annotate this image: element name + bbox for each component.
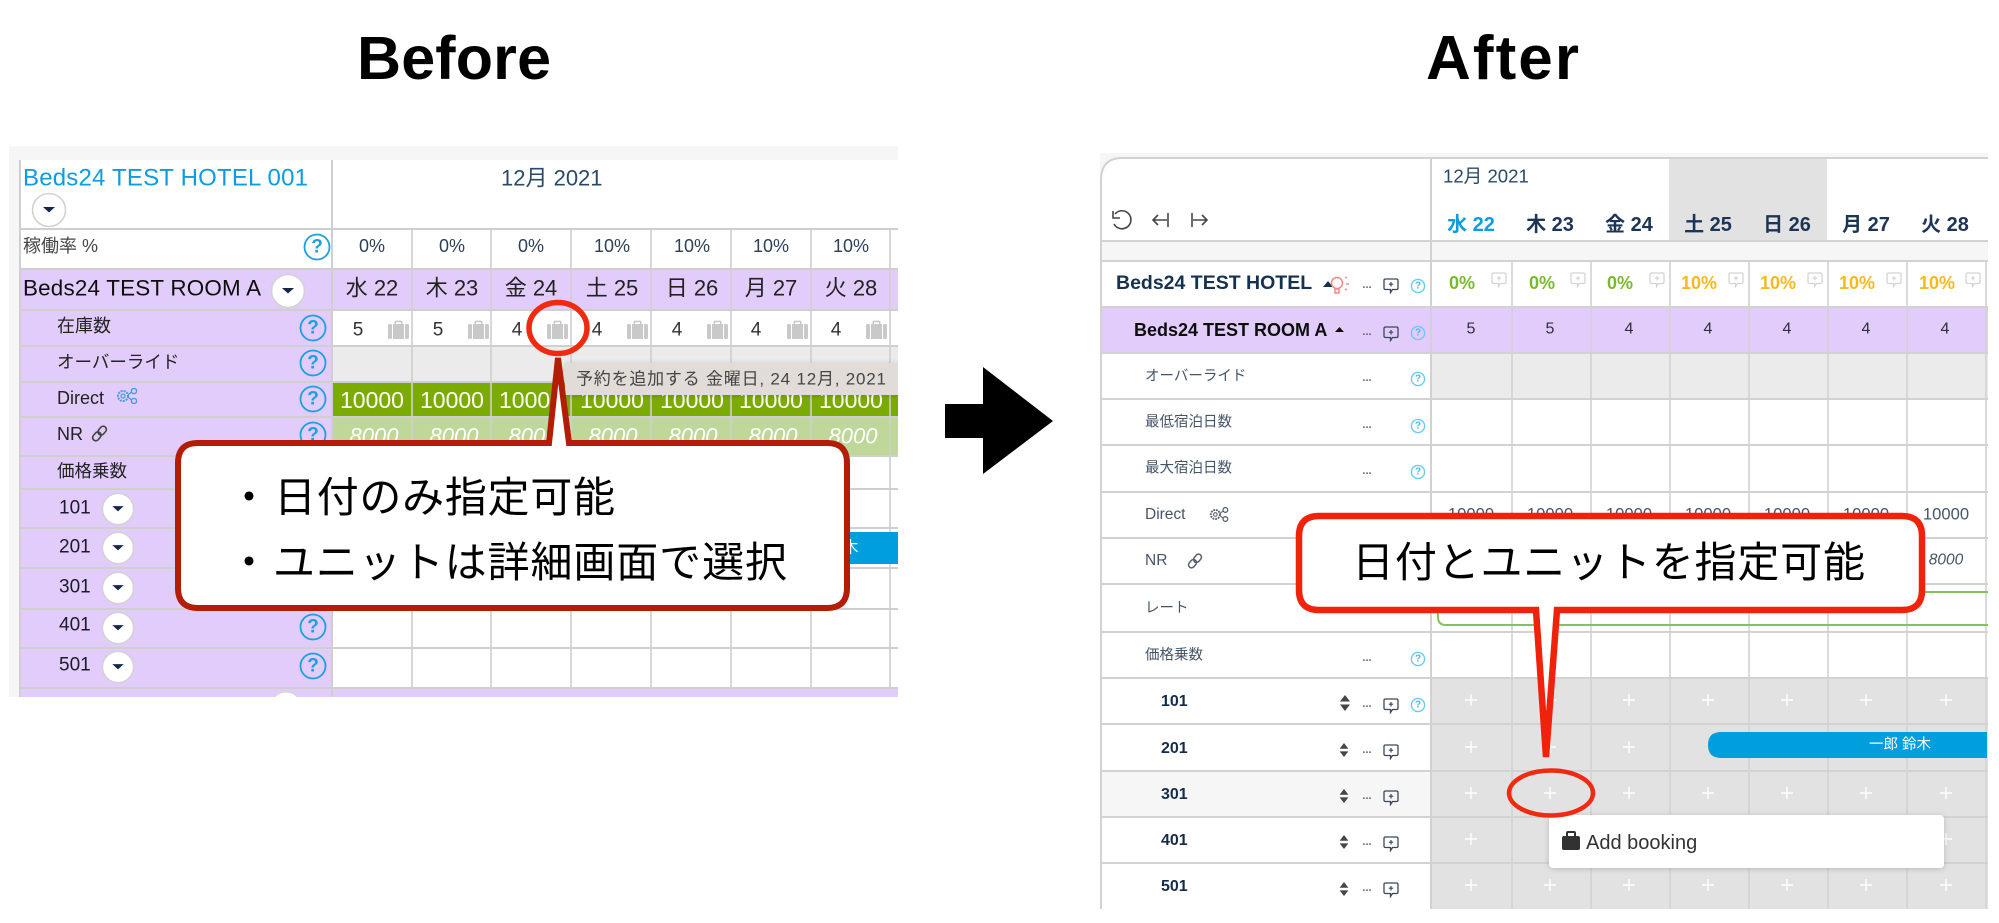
- NR price: 8000: [1929, 552, 1964, 568]
- panel: before screenshot: [9, 146, 898, 724]
- booking bar: 一郎 鈴木: [1869, 736, 1932, 753]
- setting rows: 価格乗数: [1145, 646, 1203, 664]
- hotel row: Beds24 TEST HOTEL: [1116, 272, 1312, 294]
- setting rows: [1145, 368, 1425, 666]
- hotel row: ...: [1362, 279, 1372, 291]
- unit rows: ...: [1362, 744, 1372, 756]
- unit rows: 301: [59, 576, 91, 598]
- unit rows: ...: [1362, 698, 1372, 710]
- setting rows: ...: [1362, 419, 1372, 431]
- direct price row: 10000: [1923, 504, 1969, 524]
- inventory row: 5: [353, 320, 363, 340]
- setting rows: 最大宿泊日数: [1145, 460, 1232, 476]
- occupancy row: 稼働率 %: [23, 236, 98, 256]
- direct price row: 10000: [1685, 504, 1731, 524]
- NR price row: 8000: [589, 424, 638, 448]
- direct price row: [340, 387, 883, 413]
- row labels: NR: [57, 424, 83, 444]
- callout: date only: [178, 358, 847, 608]
- unit rows: 101: [59, 498, 91, 518]
- inventory row: 4: [592, 320, 603, 340]
- row labels: ?: [307, 352, 319, 374]
- row labels: [57, 316, 326, 678]
- NR price row: 8000: [829, 424, 878, 448]
- setting rows: ...: [1362, 465, 1372, 477]
- hotel row: [1116, 272, 1980, 294]
- weekday header: 水 22: [1447, 213, 1495, 236]
- row labels: ?: [307, 616, 319, 638]
- hotel row: 10%: [1839, 273, 1875, 293]
- setting rows: ...: [1362, 652, 1372, 664]
- unit rows: [59, 493, 302, 724]
- booking bar: [1708, 732, 1987, 758]
- inventory row: 4: [512, 320, 523, 340]
- unit rows: [1161, 693, 1425, 896]
- month label: 12月 2021: [501, 166, 603, 190]
- room row: 5: [1467, 320, 1476, 338]
- room header row: 日 26: [666, 276, 718, 300]
- unit rows: ...: [1362, 836, 1372, 848]
- unit rows: 401: [1161, 832, 1188, 849]
- NR price row: 8000: [669, 424, 718, 448]
- room row: 4: [1783, 320, 1792, 338]
- row labels: 在庫数: [57, 316, 111, 336]
- room header row: 月 27: [745, 276, 797, 300]
- NR price row: [350, 424, 878, 448]
- room row: 4: [1704, 320, 1713, 338]
- room row: 4: [1625, 320, 1634, 338]
- hotel row: 10%: [1681, 273, 1717, 293]
- add-booking plus grid: [1465, 694, 1952, 891]
- header controls: [1113, 211, 1207, 229]
- setting rows: レート: [1145, 600, 1188, 616]
- room row: Beds24 TEST ROOM A: [1134, 320, 1327, 340]
- occupancy row: 0%: [439, 236, 465, 256]
- row labels: ?: [307, 318, 319, 338]
- direct price row: 10000: [499, 387, 563, 413]
- row labels: ?: [307, 388, 319, 410]
- direct price row: 10000: [1527, 504, 1573, 524]
- unit rows: ...: [1362, 790, 1372, 802]
- unit rows: 101: [1161, 693, 1188, 710]
- room header row: 火 28: [825, 276, 877, 300]
- tooltip: [565, 363, 898, 395]
- direct price row: [1448, 504, 1969, 524]
- unit rows: 501: [1161, 878, 1188, 895]
- direct price row: 10000: [580, 387, 644, 413]
- hotel row: 0%: [1449, 273, 1475, 293]
- setting rows: オーバーライド: [1145, 368, 1246, 384]
- weekday header: 土 25: [1684, 213, 1732, 236]
- unit rows: 201: [59, 536, 91, 558]
- inventory row: 4: [751, 320, 762, 340]
- setting rows: ...: [1362, 372, 1372, 384]
- month label: 12月 2021: [1443, 166, 1529, 186]
- room row: ?: [1415, 328, 1421, 338]
- direct price row: 10000: [420, 387, 484, 413]
- occupancy row: ?: [311, 236, 323, 258]
- panel: after screenshot: [1100, 153, 1988, 909]
- row labels: Direct: [57, 388, 104, 408]
- callout: date only: ユニットは詳細画面で選択: [273, 539, 787, 586]
- room row: 5: [1546, 320, 1555, 338]
- NR price row: 8000: [430, 424, 479, 448]
- callout: date only: 日付のみ指定可能: [274, 474, 615, 521]
- room header row: 木 23: [426, 276, 478, 300]
- unit rows: 501: [59, 654, 91, 676]
- row labels: ?: [307, 656, 319, 676]
- NR price row: 8000: [509, 424, 558, 448]
- hotel row: 10%: [1919, 273, 1955, 293]
- row labels: ?: [307, 424, 319, 446]
- inventory row: 4: [831, 320, 842, 340]
- weekday header: 火 28: [1921, 214, 1969, 236]
- row labels: 価格乗数: [57, 461, 127, 481]
- inventory row: [353, 320, 887, 340]
- hotel row: ?: [1415, 280, 1421, 292]
- direct price row: 10000: [819, 387, 883, 413]
- room row: [1134, 320, 1950, 340]
- occupancy row: 10%: [753, 236, 789, 256]
- highlight circle: plus cell: [1509, 770, 1593, 816]
- title: Before: Before: [357, 24, 551, 92]
- direct price row: 10000: [739, 387, 803, 413]
- tooltip: 予約を追加する 金曜日, 24 12月, 2021: [576, 370, 886, 388]
- icon: hotel dropdown: [32, 194, 66, 226]
- highlight circle: suitcase icon: [529, 302, 587, 354]
- room row: ...: [1362, 326, 1372, 338]
- weekday header: 月 27: [1842, 214, 1890, 236]
- inventory row: 4: [672, 320, 683, 340]
- title: After: After: [1426, 24, 1579, 93]
- weekday header: 金 24: [1605, 213, 1654, 236]
- weekday header: 木 23: [1526, 213, 1574, 236]
- room header row: Beds24 TEST ROOM A: [23, 276, 261, 300]
- occupancy row: [23, 234, 869, 260]
- add booking popup: Add booking: [1586, 832, 1697, 854]
- add booking popup: [1549, 815, 1944, 868]
- arrow: before to after: [945, 367, 1053, 474]
- occupancy row: 0%: [518, 236, 544, 256]
- direct price row: 10000: [1764, 504, 1810, 524]
- hotel row: 10%: [1760, 273, 1796, 293]
- setting rows: ?: [1415, 374, 1421, 384]
- callout: date only: ・: [228, 539, 270, 586]
- unit rows: 401: [59, 614, 91, 636]
- booking bar label: 一郎 鈴木: [790, 538, 858, 556]
- hotel name: Beds24 TEST HOTEL 001: [23, 164, 308, 192]
- setting rows: 最低宿泊日数: [1145, 414, 1232, 430]
- NR price row: 8000: [350, 424, 399, 448]
- room header row: 土 25: [586, 276, 638, 300]
- callout: date and unit: [1299, 516, 1922, 757]
- direct price row: 10000: [1606, 504, 1652, 524]
- room header row: [23, 274, 877, 308]
- unit rows: 201: [1161, 740, 1188, 757]
- room row: 4: [1862, 320, 1871, 338]
- hotel row: 0%: [1607, 273, 1633, 293]
- row labels: オーバーライド: [57, 352, 179, 372]
- occupancy row: 0%: [359, 236, 385, 256]
- unit rows: ?: [1415, 700, 1421, 710]
- rate plan bar: [1438, 592, 1988, 625]
- weekday header: [1447, 213, 1969, 236]
- setting rows: ?: [1415, 420, 1421, 432]
- direct price row: 10000: [1448, 504, 1494, 524]
- setting rows: ?: [1415, 654, 1421, 664]
- occupancy row: 10%: [594, 236, 630, 256]
- direct price row: 10000: [1843, 504, 1889, 524]
- hotel row: 0%: [1529, 273, 1555, 293]
- unit rows: 301: [1161, 786, 1188, 803]
- setting rows: Direct: [1145, 506, 1186, 523]
- inventory row: 5: [433, 320, 443, 340]
- direct price row: 10000: [340, 387, 404, 413]
- room header row: 水 22: [346, 276, 398, 300]
- occupancy row: 10%: [833, 236, 869, 256]
- setting rows: NR: [1145, 552, 1167, 569]
- callout: date and unit: 日付とユニットを指定可能: [1352, 539, 1865, 586]
- setting rows: ?: [1415, 466, 1421, 478]
- direct price row: 10000: [660, 387, 724, 413]
- room header row: 金 24: [505, 276, 557, 300]
- occupancy row: 10%: [674, 236, 710, 256]
- callout: date only: ・: [228, 474, 270, 521]
- NR price row: 8000: [749, 424, 798, 448]
- weekday header: 日 26: [1763, 214, 1811, 236]
- room row: 4: [1941, 320, 1950, 338]
- unit rows: ...: [1362, 882, 1372, 894]
